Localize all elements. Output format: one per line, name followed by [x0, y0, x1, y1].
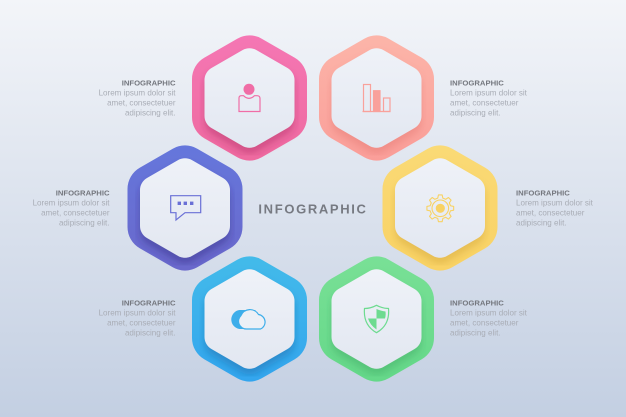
text block: top right — [450, 79, 528, 118]
icon: cloud — [231, 310, 265, 329]
hexagon: indigo speech bubble — [152, 170, 218, 246]
text block: middle left: amet, consectetuer — [41, 209, 110, 218]
text block: top right: INFOGRAPHIC — [450, 79, 504, 88]
text block: bottom left: INFOGRAPHIC — [122, 299, 176, 308]
text block: top right: Lorem ipsum dolor sit — [450, 89, 528, 98]
icon: gear — [427, 195, 454, 222]
text block: bottom left — [99, 299, 176, 338]
icon: speech bubble — [171, 196, 201, 220]
text block: top right: amet, consectetuer — [450, 99, 519, 108]
icon: person — [239, 84, 260, 112]
text block: top left: amet, consectetuer — [107, 99, 176, 108]
text block: middle right: Lorem ipsum dolor sit — [516, 199, 594, 208]
text block: bottom right — [450, 299, 528, 338]
text block: bottom right: Lorem ipsum dolor sit — [450, 309, 528, 318]
text block: bottom right: adipiscing elit. — [450, 329, 501, 338]
hexagon: coral bar chart — [344, 60, 410, 136]
text block: top left: adipiscing elit. — [125, 109, 176, 118]
icon: shield — [364, 305, 389, 333]
hexagon: yellow gear — [407, 170, 473, 246]
text block: bottom left: Lorem ipsum dolor sit — [99, 309, 176, 318]
center title: INFOGRAPHIC — [258, 202, 368, 216]
text block: top left — [99, 79, 176, 118]
text block: bottom right: amet, consectetuer — [450, 319, 519, 328]
text block: top right: adipiscing elit. — [450, 109, 501, 118]
icon: bar chart — [362, 84, 390, 112]
text block: bottom left: adipiscing elit. — [125, 329, 176, 338]
text block: middle right: adipiscing elit. — [516, 219, 567, 228]
text block: bottom right: INFOGRAPHIC — [450, 299, 504, 308]
text block: middle right: amet, consectetuer — [516, 209, 585, 218]
text block: top left: INFOGRAPHIC — [122, 79, 176, 88]
text block: middle left: INFOGRAPHIC — [56, 189, 110, 198]
hexagon: blue cloud — [216, 281, 282, 357]
text block: middle left: adipiscing elit. — [59, 219, 110, 228]
text block: middle left — [33, 189, 110, 228]
text block: middle right: INFOGRAPHIC — [516, 189, 570, 198]
text block: bottom left: amet, consectetuer — [107, 319, 176, 328]
text block: top left: Lorem ipsum dolor sit — [99, 89, 176, 98]
text block: middle left: Lorem ipsum dolor sit — [33, 199, 110, 208]
text block: middle right — [516, 189, 594, 228]
hexagon: pink person — [216, 60, 282, 136]
hexagon: green shield — [344, 281, 410, 357]
